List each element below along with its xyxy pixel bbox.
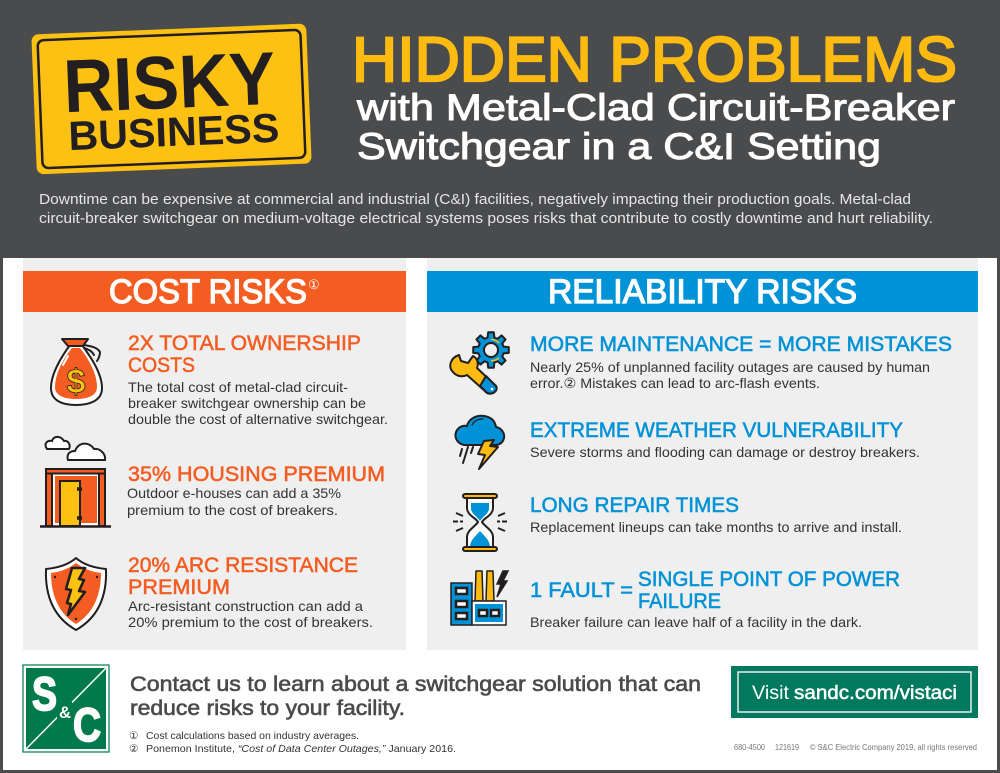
footnotes [129, 730, 456, 755]
heading: cost risks: COST RISKS [109, 273, 307, 311]
text: 2x total ownership costs: The total cost of metal-clad circuit- [128, 379, 348, 395]
icon: money bag [51, 339, 102, 405]
intro text: Downtime can be expensive at commercial and industrial (C&I) facilities, negatively impacting their production goals. Metal-clad [39, 191, 911, 208]
text: 20% arc resistance premium: 20% ARC RESISTANCE [128, 554, 358, 577]
header sign: Risky Business [31, 24, 312, 174]
text: 2x total ownership costs: double the cost of alternative switchgear. [128, 411, 388, 427]
header sign: Risky Business: RISKY [62, 36, 277, 128]
legal line: © S&C Electric Company 2019, all rights reserved [810, 743, 977, 752]
footnotes: Cost calculations based on industry averages. [146, 730, 359, 742]
panel: reliability risks [427, 258, 978, 650]
text: 2x total ownership costs: breaker switchgear ownership can be [128, 395, 366, 411]
call to action: reduce risks to your facility. [130, 697, 405, 720]
legal line [734, 743, 977, 752]
text: 35% housing premium [127, 463, 385, 518]
text: 20% arc resistance premium [128, 554, 373, 630]
logo: S&C: S [32, 667, 57, 720]
intro text [39, 191, 933, 227]
icon: shield with lightning [46, 558, 106, 630]
heading: reliability risks [427, 271, 978, 312]
title: with Metal-Clad Circuit-Breaker [356, 87, 955, 128]
text: 35% housing premium: 35% HOUSING PREMIUM [128, 463, 385, 486]
legal line: 121619 [775, 743, 799, 752]
text: 20% arc resistance premium: Arc-resistant construction can add a [128, 598, 363, 614]
title [352, 25, 957, 167]
footnotes: ① [129, 730, 139, 742]
text: 35% housing premium: premium to the cost of breakers. [127, 502, 338, 518]
title: HIDDEN PROBLEMS [352, 25, 957, 95]
logo: S&C: C [73, 698, 101, 751]
text: extreme weather: EXTREME WEATHER VULNERABILITY [530, 419, 903, 442]
header sign: Risky Business: BUSINESS [67, 105, 280, 159]
title: Switchgear in a C&I Setting [357, 126, 881, 167]
white content area [3, 258, 997, 770]
heading: cost risks: ① [308, 277, 320, 292]
button: visit sandc.com/vistaci [731, 666, 978, 718]
text: 2x total ownership costs: COSTS [128, 354, 195, 377]
icon: storm cloud [456, 416, 504, 469]
text: 35% housing premium: Outdoor e-houses can add a 35% [127, 485, 341, 501]
panel: cost risks [23, 258, 406, 650]
text: more maintenance: MORE MAINTENANCE = MORE MISTAKES [530, 333, 952, 356]
icon: wrench and gear [450, 332, 509, 394]
footnotes: Ponemon Institute, “Cost of Data Center Outages,” January 2016. [146, 743, 456, 755]
icon: e-house with clouds [40, 437, 111, 526]
call to action [130, 673, 701, 720]
icon: money bag: $ [67, 363, 86, 401]
legal line: 680-4500 [734, 743, 766, 752]
logo: S&C: & [59, 703, 71, 722]
text: 2x total ownership costs [128, 332, 388, 427]
text: long repair times: Replacement lineups can take months to arrive and install. [530, 519, 902, 535]
text: long repair times [530, 494, 902, 535]
text: 20% arc resistance premium: 20% premium to the cost of breakers. [128, 614, 373, 630]
footnotes: ② [129, 743, 139, 755]
button: visit sandc.com/vistaci: Visit [752, 683, 790, 704]
text: 1 fault: Breaker failure can leave half of a facility in the dark. [530, 614, 862, 630]
text: 1 fault: 1 FAULT = [530, 579, 633, 602]
call to action: Contact us to learn about a switchgear solution that can [130, 673, 701, 696]
text: extreme weather [530, 419, 920, 460]
text: more maintenance: Nearly 25% of unplanned facility outages are caused by human [530, 359, 930, 375]
text: extreme weather: Severe storms and flooding can damage or destroy breakers. [530, 444, 920, 460]
icon: factory [451, 571, 508, 625]
icon: hourglass [453, 494, 507, 551]
text: 20% arc resistance premium: PREMIUM [128, 576, 230, 599]
intro text: circuit-breaker switchgear on medium-voltage electrical systems poses risks that contribute to costly downtime and hurt reliability. [39, 210, 933, 227]
logo: S&C [23, 665, 109, 752]
text: more maintenance: error.② Mistakes can lead to arc-flash events. [530, 375, 820, 391]
heading: cost risks [23, 271, 406, 312]
text: 1 fault: SINGLE POINT OF POWER [638, 568, 900, 591]
text: 1 fault: FAILURE [638, 590, 721, 613]
text: long repair times: LONG REPAIR TIMES [530, 494, 739, 517]
text: 2x total ownership costs: 2X TOTAL OWNERSHIP [128, 332, 361, 355]
button: visit sandc.com/vistaci: sandc.com/vistaci [794, 683, 957, 704]
heading: reliability risks: RELIABILITY RISKS [548, 273, 857, 311]
text: 1 fault [530, 568, 900, 630]
text: more maintenance [530, 333, 952, 391]
